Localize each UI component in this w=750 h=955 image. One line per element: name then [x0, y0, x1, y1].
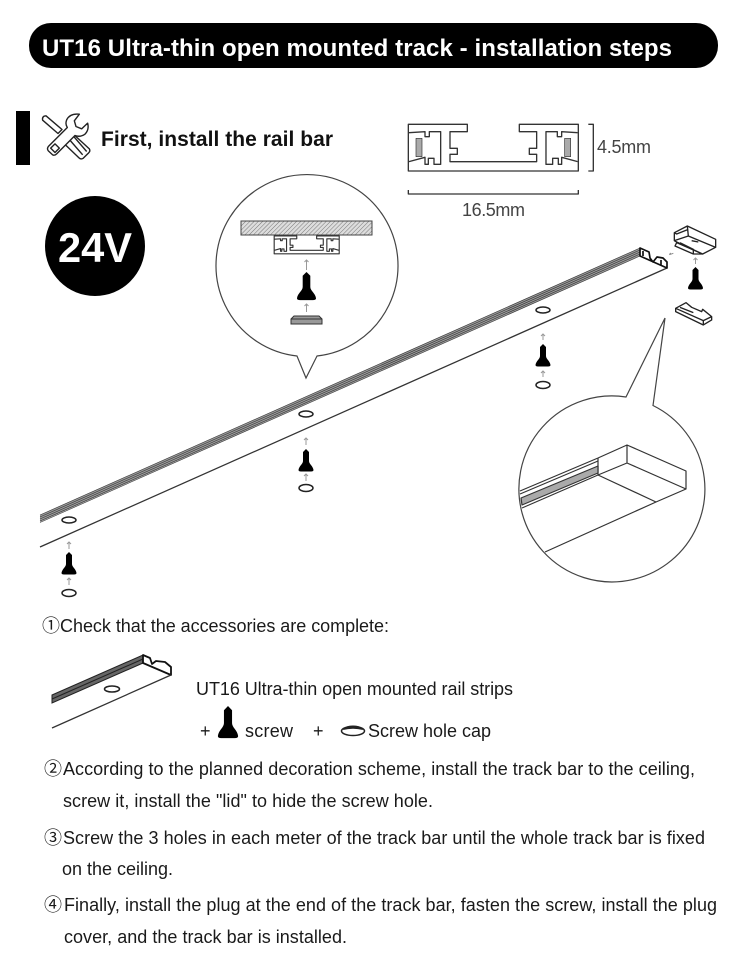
step 1 text: Check that the accessories are complete: — [60, 616, 389, 636]
screw — [297, 272, 316, 300]
step 2 text — [44, 759, 695, 811]
badge: 24V: 24V — [58, 224, 132, 271]
screw set: left — [62, 517, 76, 596]
track rail — [40, 248, 667, 547]
section marker bar — [16, 111, 30, 165]
ceiling slab — [241, 221, 372, 235]
track profile dimension drawing: 4.5mm — [597, 137, 651, 157]
arrow — [304, 304, 308, 312]
title banner: UT16 Ultra-thin open mounted track - installation steps — [42, 35, 672, 62]
screw set: centre — [298, 411, 314, 492]
screw hole cap — [291, 316, 322, 324]
callout bubble: ceiling mounting detail — [216, 175, 398, 378]
icon: crossed tools — [42, 114, 90, 159]
accessory: screw hole cap: Screw hole cap — [368, 721, 491, 741]
track cross-section — [274, 236, 339, 254]
step 4 text: cover, and the track bar is installed. — [64, 927, 347, 947]
end plug with screw and cover — [669, 226, 716, 325]
badge: 24V — [45, 196, 145, 296]
accessory: screw hole cap: + — [313, 721, 324, 741]
section heading: First, install the rail bar — [101, 128, 333, 151]
step 4 text: ④ — [44, 895, 62, 915]
step 3 text — [44, 828, 705, 879]
accessory: rail strip — [52, 655, 171, 728]
step 3 text: Screw the 3 holes in each meter of the track bar until the whole track bar is fixed — [63, 828, 705, 848]
track profile dimension drawing: 16.5mm — [462, 200, 525, 220]
step 2 text: ② — [44, 759, 62, 779]
step 4 text — [44, 895, 717, 947]
arrow — [304, 260, 308, 270]
accessory: screw — [200, 706, 294, 741]
step 3 text: ③ — [44, 828, 62, 848]
step 3 text: on the ceiling. — [62, 859, 173, 879]
callout bubble: track end detail — [519, 318, 705, 582]
step 1 text: ① — [42, 616, 60, 636]
accessory: screw: + — [200, 721, 211, 741]
track profile dimension drawing — [408, 124, 651, 220]
screw set: right — [536, 307, 550, 388]
accessory: screw: screw — [245, 721, 294, 741]
step 2 text: According to the planned decoration scheme, install the track bar to the ceiling, — [63, 759, 695, 779]
step 2 text: screw it, install the "lid" to hide the screw hole. — [63, 791, 433, 811]
accessory: screw hole cap — [313, 721, 491, 741]
title banner — [29, 23, 718, 68]
accessory label: UT16 Ultra-thin open mounted rail strips — [196, 679, 513, 699]
step 4 text: Finally, install the plug at the end of the track bar, fasten the screw, install the plug — [64, 895, 717, 915]
